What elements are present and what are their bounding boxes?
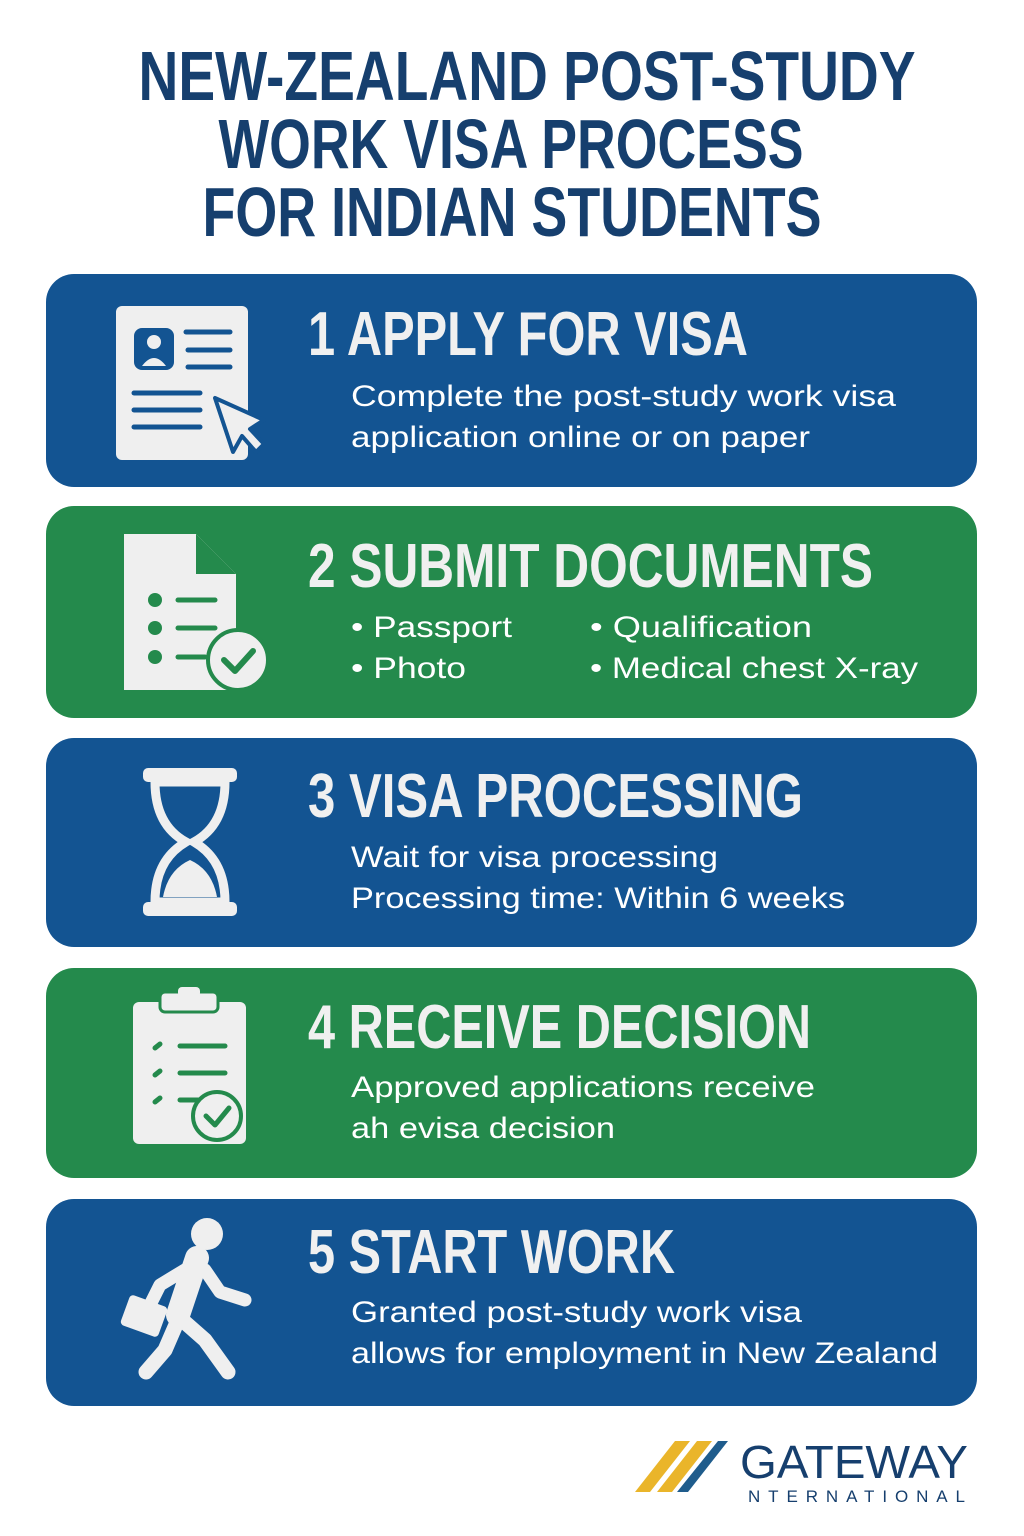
logo: gateway international: NTERNATIONAL	[748, 1487, 965, 1506]
panel: step 5 start work	[46, 1199, 977, 1406]
bullet list: • Photo	[351, 652, 466, 685]
icon: document checklist	[124, 534, 268, 690]
heading: 4 RECEIVE DECISION	[308, 993, 811, 1062]
heading: 5 START WORK	[308, 1218, 675, 1287]
text block: allows for employment in New Zealand	[351, 1337, 938, 1370]
text block	[351, 841, 845, 915]
icon: walking person with briefcase	[120, 1218, 245, 1372]
title	[138, 37, 916, 251]
text block	[351, 380, 896, 454]
text block: ah evisa decision	[351, 1112, 615, 1145]
bullet list: • Medical chest X-ray	[590, 652, 918, 685]
panel: step 2 submit documents	[46, 506, 977, 718]
panel: step 1 apply for visa	[46, 274, 977, 487]
heading: 2 SUBMIT DOCUMENTS	[308, 532, 873, 601]
icon: application form with cursor	[116, 306, 264, 460]
text block	[351, 1071, 815, 1145]
text block: Complete the post-study work visa	[351, 380, 896, 413]
title: FOR INDIAN STUDENTS	[202, 173, 822, 251]
text block: Wait for visa processing	[351, 841, 718, 874]
text block: Granted post-study work visa	[351, 1296, 802, 1329]
bullet list: • Qualification	[590, 611, 812, 644]
heading: 3 VISA PROCESSING	[308, 762, 803, 831]
text block	[351, 1296, 938, 1370]
heading: 1 APPLY FOR VISA	[308, 300, 748, 369]
bullet list: • Passport	[351, 611, 513, 644]
text block: application online or on paper	[351, 421, 810, 454]
text block: Processing time: Within 6 weeks	[351, 882, 845, 915]
title: WORK VISA PROCESS	[218, 105, 804, 183]
text block: Approved applications receive	[351, 1071, 815, 1104]
icon: clipboard with check	[133, 987, 246, 1144]
icon: hourglass	[143, 768, 237, 916]
logo: gateway international: GATEWAY	[740, 1436, 968, 1488]
panel: step 3 visa processing	[46, 738, 977, 947]
bullet list	[351, 611, 918, 685]
logo: gateway international	[635, 1436, 968, 1506]
panel: step 4 receive decision	[46, 968, 977, 1178]
